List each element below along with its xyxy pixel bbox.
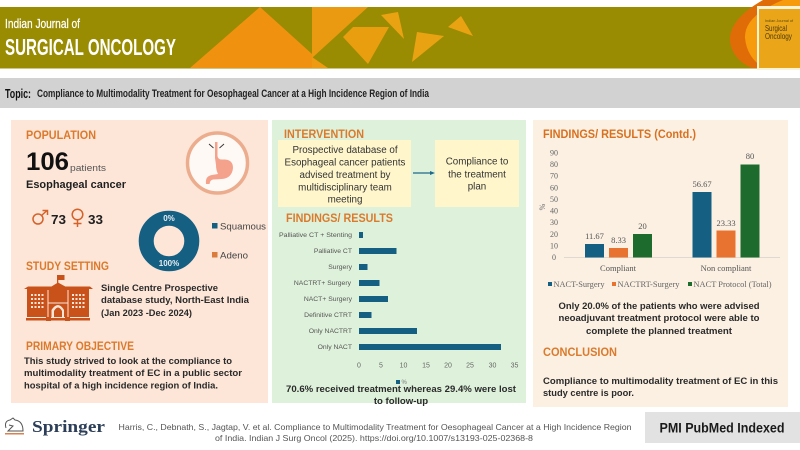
heading: population: POPULATION — [26, 130, 96, 142]
bar chart: compliance: 23.33 — [716, 218, 736, 228]
box: intervention description: Esophageal cancer patients — [285, 158, 406, 168]
gender counts: 33 — [88, 212, 103, 227]
bar chart: treatment received: Definitive CTRT — [304, 312, 352, 319]
objective text — [24, 356, 243, 390]
bar chart: compliance: 20 — [638, 221, 647, 231]
bar chart: compliance: Compliant — [600, 263, 637, 273]
journal cover — [730, 0, 800, 70]
heading: intervention: INTERVENTION — [284, 129, 364, 141]
findings note: 70.6% received treatment whereas 29.4% were lost — [286, 384, 517, 395]
banner title: SURGICAL ONCOLOGY — [5, 34, 176, 60]
conclusion text: study centre is poor. — [543, 387, 634, 398]
donut chart: 0% — [163, 214, 175, 223]
heading: conclusion: CONCLUSION — [543, 347, 617, 359]
box: compliance outcome — [435, 140, 519, 207]
conclusion text: Compliance to multimodality treatment of EC in this — [543, 375, 778, 386]
donut legend: Squamous — [220, 222, 267, 232]
donut chart: 100% — [159, 259, 179, 268]
bar chart: compliance: % — [538, 203, 547, 210]
topic bar — [0, 78, 800, 108]
bar chart: compliance: 60 — [550, 184, 558, 192]
bar chart: compliance: 20 — [550, 230, 558, 239]
topic bar: Compliance to Multimodality Treatment for Oesophageal Cancer at a High Incidence Region of India — [37, 88, 430, 100]
bar chart: compliance: 80 — [550, 160, 558, 169]
patient count: 106 — [26, 148, 69, 176]
bar chart: compliance: 8.33 — [611, 235, 626, 245]
bar chart: treatment received — [279, 232, 518, 386]
bar chart: compliance: 80 — [746, 151, 754, 161]
bar chart: treatment received: 25 — [466, 362, 474, 370]
box: intervention description: advised treatment by — [300, 170, 391, 181]
bar chart: treatment received: 5 — [379, 362, 383, 370]
bar chart: treatment received: 15 — [422, 362, 430, 370]
compliance note — [558, 301, 760, 336]
box: compliance outcome: plan — [468, 182, 486, 192]
box: compliance outcome: Compliance to — [446, 156, 509, 168]
bar chart: treatment received: 0 — [357, 362, 361, 370]
bar chart: compliance: 50 — [550, 195, 558, 204]
indexing badge — [645, 412, 800, 443]
bar chart: treatment received: Palliative CT + Stenting — [279, 232, 352, 239]
bar chart: compliance: Non compliant — [701, 263, 752, 273]
conclusion text — [543, 375, 778, 398]
study setting text: database study, North-East India — [101, 295, 250, 305]
bar chart: treatment received: NACT+ Surgery — [304, 296, 353, 303]
donut chart — [146, 214, 192, 268]
panel: intervention and findings — [272, 120, 526, 407]
icon: hospital building — [24, 275, 93, 321]
bar chart: treatment received: 20 — [444, 362, 452, 370]
journal cover: Oncology — [765, 31, 793, 41]
box: intervention description: Prospective database of — [292, 145, 398, 156]
findings note — [286, 384, 517, 407]
publisher logo: Springer — [32, 417, 106, 436]
heading: primary objective: PRIMARY OBJECTIVE — [26, 341, 134, 353]
banner title: Indian Journal of — [5, 16, 80, 31]
bar chart: compliance: 90 — [550, 148, 558, 158]
diagnosis label: Esophageal cancer — [26, 179, 127, 191]
compliance note: neoadjuvant treatment protocol were able to — [558, 313, 760, 323]
journal cover: Indian Journal of — [765, 19, 794, 23]
topic bar: Topic: — [5, 86, 31, 101]
bar chart: compliance: NACTRT-Surgery — [618, 280, 680, 289]
indexing badge: PMI PubMed Indexed — [660, 420, 784, 436]
publisher logo — [5, 417, 106, 436]
bar chart: treatment received: % — [402, 380, 408, 386]
citation — [118, 422, 632, 443]
objective text: This study strived to look at the compliance to — [24, 356, 233, 366]
panel: findings continued and conclusion — [533, 120, 788, 407]
heading: study setting: STUDY SETTING — [26, 261, 109, 273]
journal banner — [0, 0, 800, 70]
bar chart: compliance: 11.67 — [585, 231, 604, 241]
patient count — [26, 148, 107, 176]
banner title — [5, 16, 176, 60]
bar chart: compliance — [538, 148, 780, 289]
box: intervention description: meeting — [328, 194, 362, 206]
bar chart: compliance: 56.67 — [692, 179, 712, 189]
bar chart: compliance: 10 — [550, 242, 558, 250]
patient count: patients — [70, 163, 107, 173]
heading: findings: FINDINGS/ RESULTS — [286, 211, 393, 225]
bar chart: treatment received: Only NACTRT — [309, 328, 352, 335]
study setting text — [101, 283, 250, 318]
citation: Harris, C., Debnath, S., Jagtap, V. et al. Compliance to Multimodality Treatment for Oesophageal Cancer at a High Incidence Region — [118, 422, 632, 432]
bar chart: compliance: 30 — [550, 218, 558, 227]
heading: findings continued: FINDINGS/ RESULTS (Contd.) — [543, 127, 696, 141]
box: compliance outcome: the treatment — [448, 170, 506, 180]
bar chart: compliance: NACT Protocol (Total) — [694, 280, 772, 289]
donut legend — [212, 222, 267, 260]
bar chart: compliance: 0 — [552, 253, 556, 262]
gender counts — [33, 209, 103, 227]
objective text: hospital of a high incidence region of India. — [24, 380, 218, 390]
bar chart: treatment received: 30 — [489, 362, 496, 370]
objective text: multimodality treatment of EC in a public sector — [24, 368, 243, 378]
icon: stomach — [188, 133, 248, 193]
bar chart: treatment received: Palliative CT — [314, 248, 352, 255]
journal cover: Surgical — [765, 23, 787, 33]
box: intervention description: multidisciplinary team — [298, 182, 392, 194]
compliance note: complete the planned treatment — [586, 326, 732, 336]
study setting text: (Jan 2023 -Dec 2024) — [101, 308, 192, 318]
bar chart: treatment received: 35 — [511, 362, 518, 370]
panel: population and study — [11, 120, 268, 403]
citation: of India. Indian J Surg Oncol (2025). https://doi.org/10.1007/s13193-025-02368-8 — [215, 433, 533, 443]
arrow — [413, 171, 435, 175]
study setting text: Single Centre Prospective — [101, 283, 218, 293]
bar chart: treatment received: 10 — [400, 362, 407, 370]
donut legend: Adeno — [220, 250, 248, 260]
bar chart: compliance: NACT-Surgery — [554, 280, 604, 289]
findings note: to follow-up — [374, 396, 428, 407]
bar chart: treatment received: Surgery — [328, 264, 353, 271]
compliance note: Only 20.0% of the patients who were advised — [558, 301, 760, 311]
gender counts: 73 — [51, 212, 66, 227]
box: intervention description — [278, 140, 411, 207]
bar chart: treatment received: NACTRT+ Surgery — [294, 280, 352, 287]
bar chart: compliance: 70 — [550, 172, 558, 180]
bar chart: treatment received: Only NACT — [318, 344, 352, 351]
bar chart: compliance: 40 — [550, 206, 558, 216]
